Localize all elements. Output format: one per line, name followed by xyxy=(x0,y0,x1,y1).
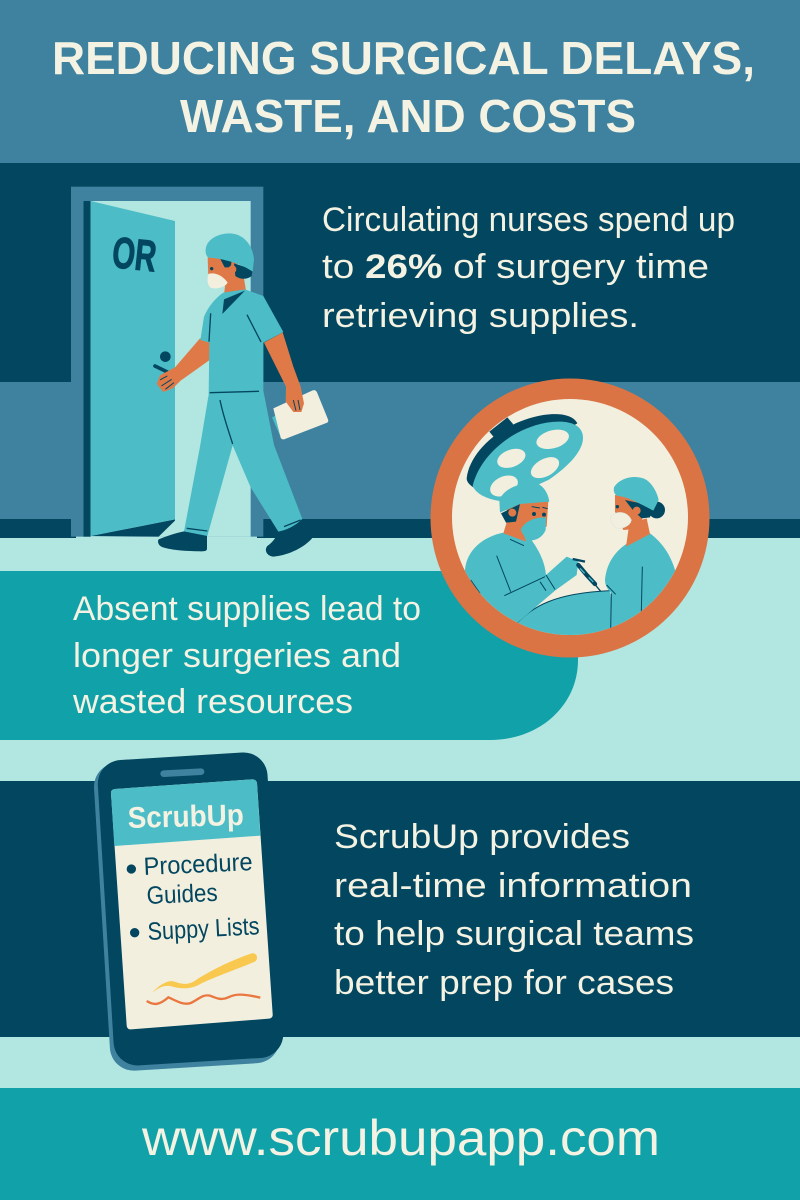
illustration: door to operating room xyxy=(71,187,263,537)
app title: ScrubUp xyxy=(127,799,244,835)
illustration: circulating nurse walking xyxy=(157,233,328,557)
line 3: to help surgical teams xyxy=(334,915,694,953)
right surgeon xyxy=(605,477,676,643)
footer with website xyxy=(0,1088,800,1200)
patient drape xyxy=(518,591,614,635)
app list item 1 continued: Guides xyxy=(146,879,218,910)
line 2: real-time information xyxy=(334,867,692,905)
left surgeon xyxy=(465,483,578,633)
door sign OR: OR xyxy=(110,228,159,282)
clipboard xyxy=(272,390,328,439)
panel text line 1: Absent supplies lead to xyxy=(73,590,421,628)
dark band behind app section xyxy=(0,781,800,1037)
text: nurses retrieving supplies xyxy=(322,201,735,335)
line 4: better prep for cases xyxy=(334,964,674,1002)
panel: absent supplies xyxy=(0,571,578,740)
website address: www.scrubupapp.com xyxy=(141,1110,660,1166)
door handle xyxy=(155,351,171,372)
panel text line 2: longer surgeries and xyxy=(73,637,401,675)
line 1: ScrubUp provides xyxy=(334,818,630,856)
title line 1: REDUCING SURGICAL DELAYS, xyxy=(52,32,755,84)
line 3: retrieving supplies. xyxy=(322,297,639,335)
app screen xyxy=(111,779,273,1029)
surgical lamp xyxy=(467,414,583,501)
head xyxy=(208,257,240,287)
bullet dots xyxy=(127,864,139,937)
scrub top xyxy=(200,289,283,394)
chart squiggle orange xyxy=(147,995,260,1004)
app list item 1: Procedure xyxy=(143,848,253,881)
chain instrument xyxy=(573,559,601,591)
title line 2: WASTE, AND COSTS xyxy=(180,90,636,142)
neck xyxy=(223,278,246,300)
illustration: phone with ScrubUp app xyxy=(93,751,285,1072)
app list item 2: Suppy Lists xyxy=(147,912,260,946)
shoes xyxy=(158,519,312,557)
surgical mask xyxy=(207,273,228,288)
illustration: surgeons in circular frame xyxy=(430,378,710,658)
line 1: Circulating nurses spend up xyxy=(322,201,735,239)
trousers xyxy=(184,391,302,536)
arms xyxy=(157,332,304,412)
text: ScrubUp description xyxy=(334,818,694,1002)
panel text line 3: wasted resources xyxy=(72,683,353,721)
line 2 with 26%: to 26% of surgery time xyxy=(322,248,709,286)
scrub cap xyxy=(206,233,254,272)
header panel with title xyxy=(0,0,800,163)
chart squiggle yellow xyxy=(152,953,257,993)
